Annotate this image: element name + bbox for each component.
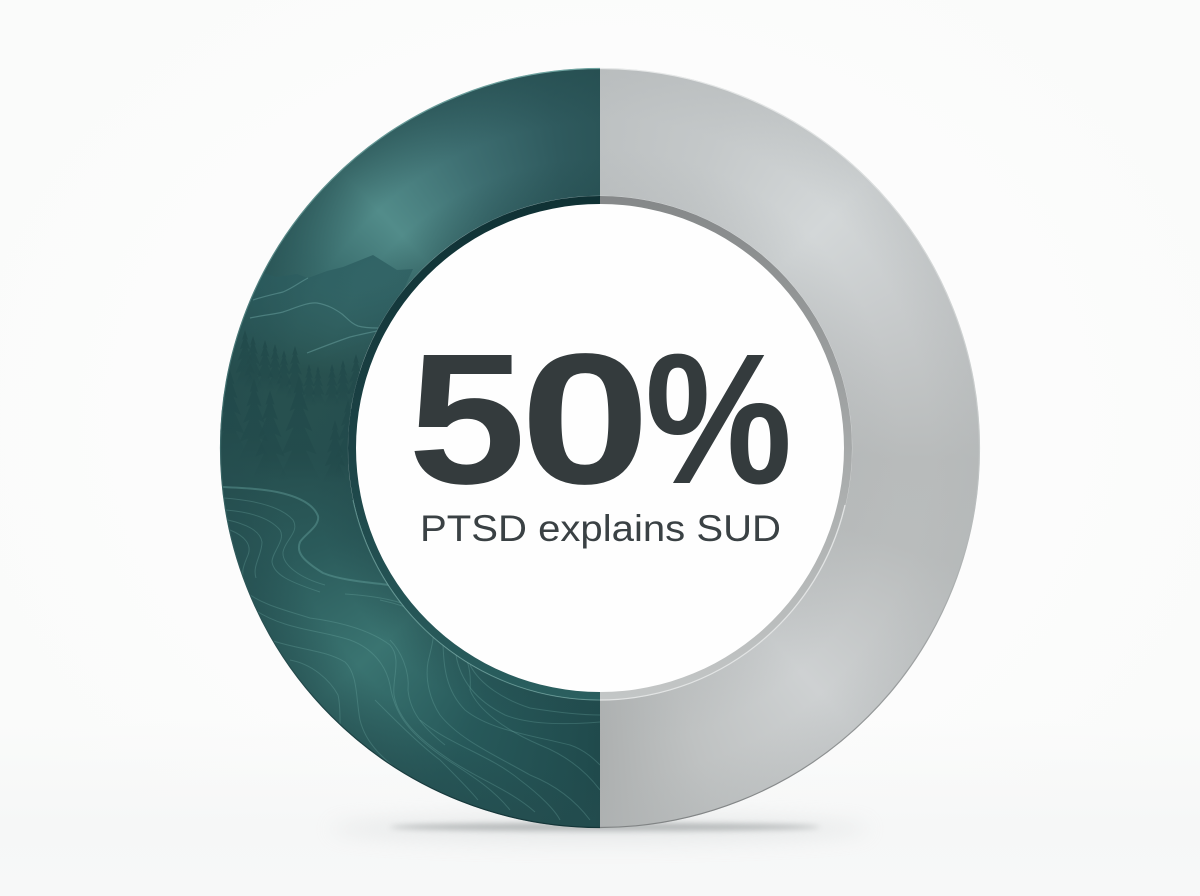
donut details and labels: [220, 68, 980, 828]
outer edge: grey: [600, 68, 979, 828]
inner bevel: grey: [600, 196, 852, 700]
inner bevel: teal: [348, 196, 600, 700]
forest: [220, 332, 360, 471]
mountains: [242, 255, 413, 335]
big number: [408, 314, 792, 523]
ground tint: [0, 720, 1200, 896]
ridge lines: [250, 278, 382, 353]
caption: PTSD explains SUD: [420, 508, 781, 549]
illustration: landscape etched in teal segment: [212, 255, 600, 820]
outer edge: teal: [220, 68, 600, 828]
infographic: donut chart: [220, 68, 980, 850]
river: [223, 487, 390, 585]
donut segment: grey 50%: [600, 69, 980, 827]
topographic contour lines: [224, 498, 600, 820]
donut segment: teal 50%: [220, 68, 600, 827]
bevel highlight: teal: [353, 500, 600, 700]
big number: %: [645, 316, 792, 523]
big number: 0: [520, 314, 650, 523]
contact shadow: [390, 823, 820, 831]
big number: 5: [408, 315, 526, 523]
donut centre disc: [356, 204, 844, 692]
soft ground shadow: [330, 815, 870, 843]
bevel highlight: grey: [600, 505, 845, 700]
